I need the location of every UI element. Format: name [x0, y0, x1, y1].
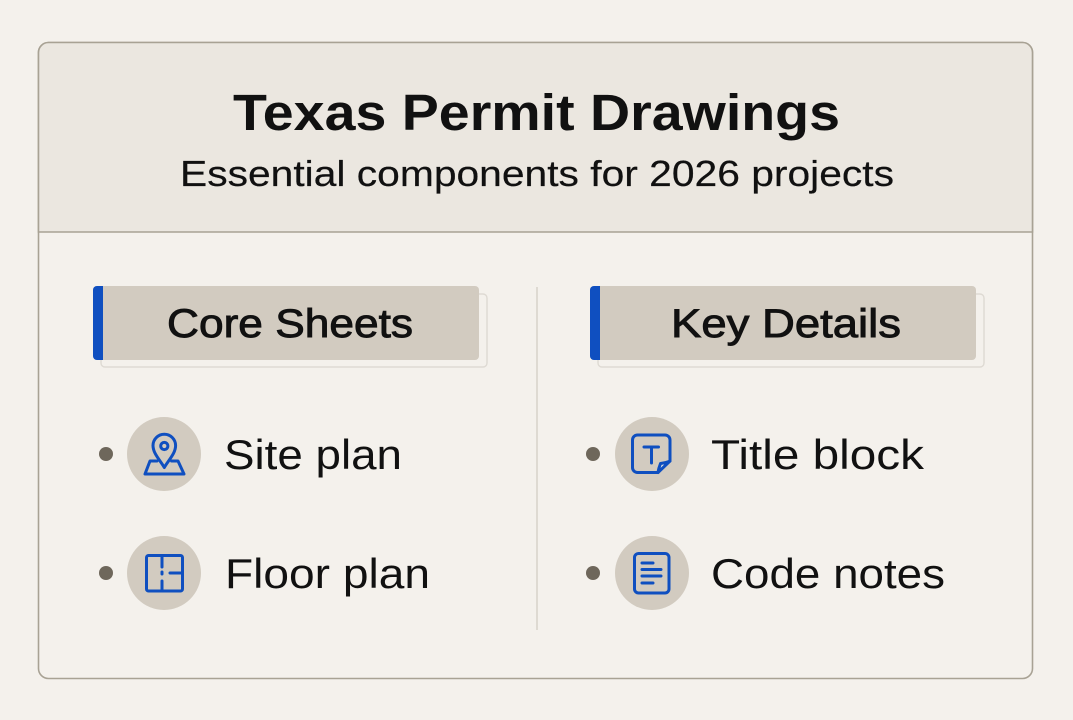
heading: key details: Key Details	[671, 302, 901, 346]
icon: map pin	[145, 434, 184, 474]
subtitle: Essential components for 2026 projects	[180, 153, 894, 194]
heading: core sheets: Core Sheets	[167, 302, 413, 346]
list item: site plan	[99, 417, 402, 491]
list item: title block	[586, 417, 924, 491]
heading: key details	[590, 286, 984, 367]
column: core sheets	[93, 286, 487, 610]
list item: site plan: Site plan	[224, 431, 402, 478]
list item: floor plan	[99, 536, 430, 610]
icon: document	[634, 554, 669, 593]
list item: title block: Title block	[711, 431, 924, 478]
list item: code notes: Code notes	[711, 550, 945, 597]
list item: floor plan: Floor plan	[225, 550, 430, 597]
icon: floor plan	[146, 556, 182, 591]
heading: core sheets	[93, 286, 487, 367]
icon: title block	[632, 435, 670, 472]
list item: code notes	[586, 536, 945, 610]
header band	[38, 42, 1032, 232]
title: Texas Permit Drawings	[233, 84, 840, 141]
column: key details	[586, 286, 984, 610]
